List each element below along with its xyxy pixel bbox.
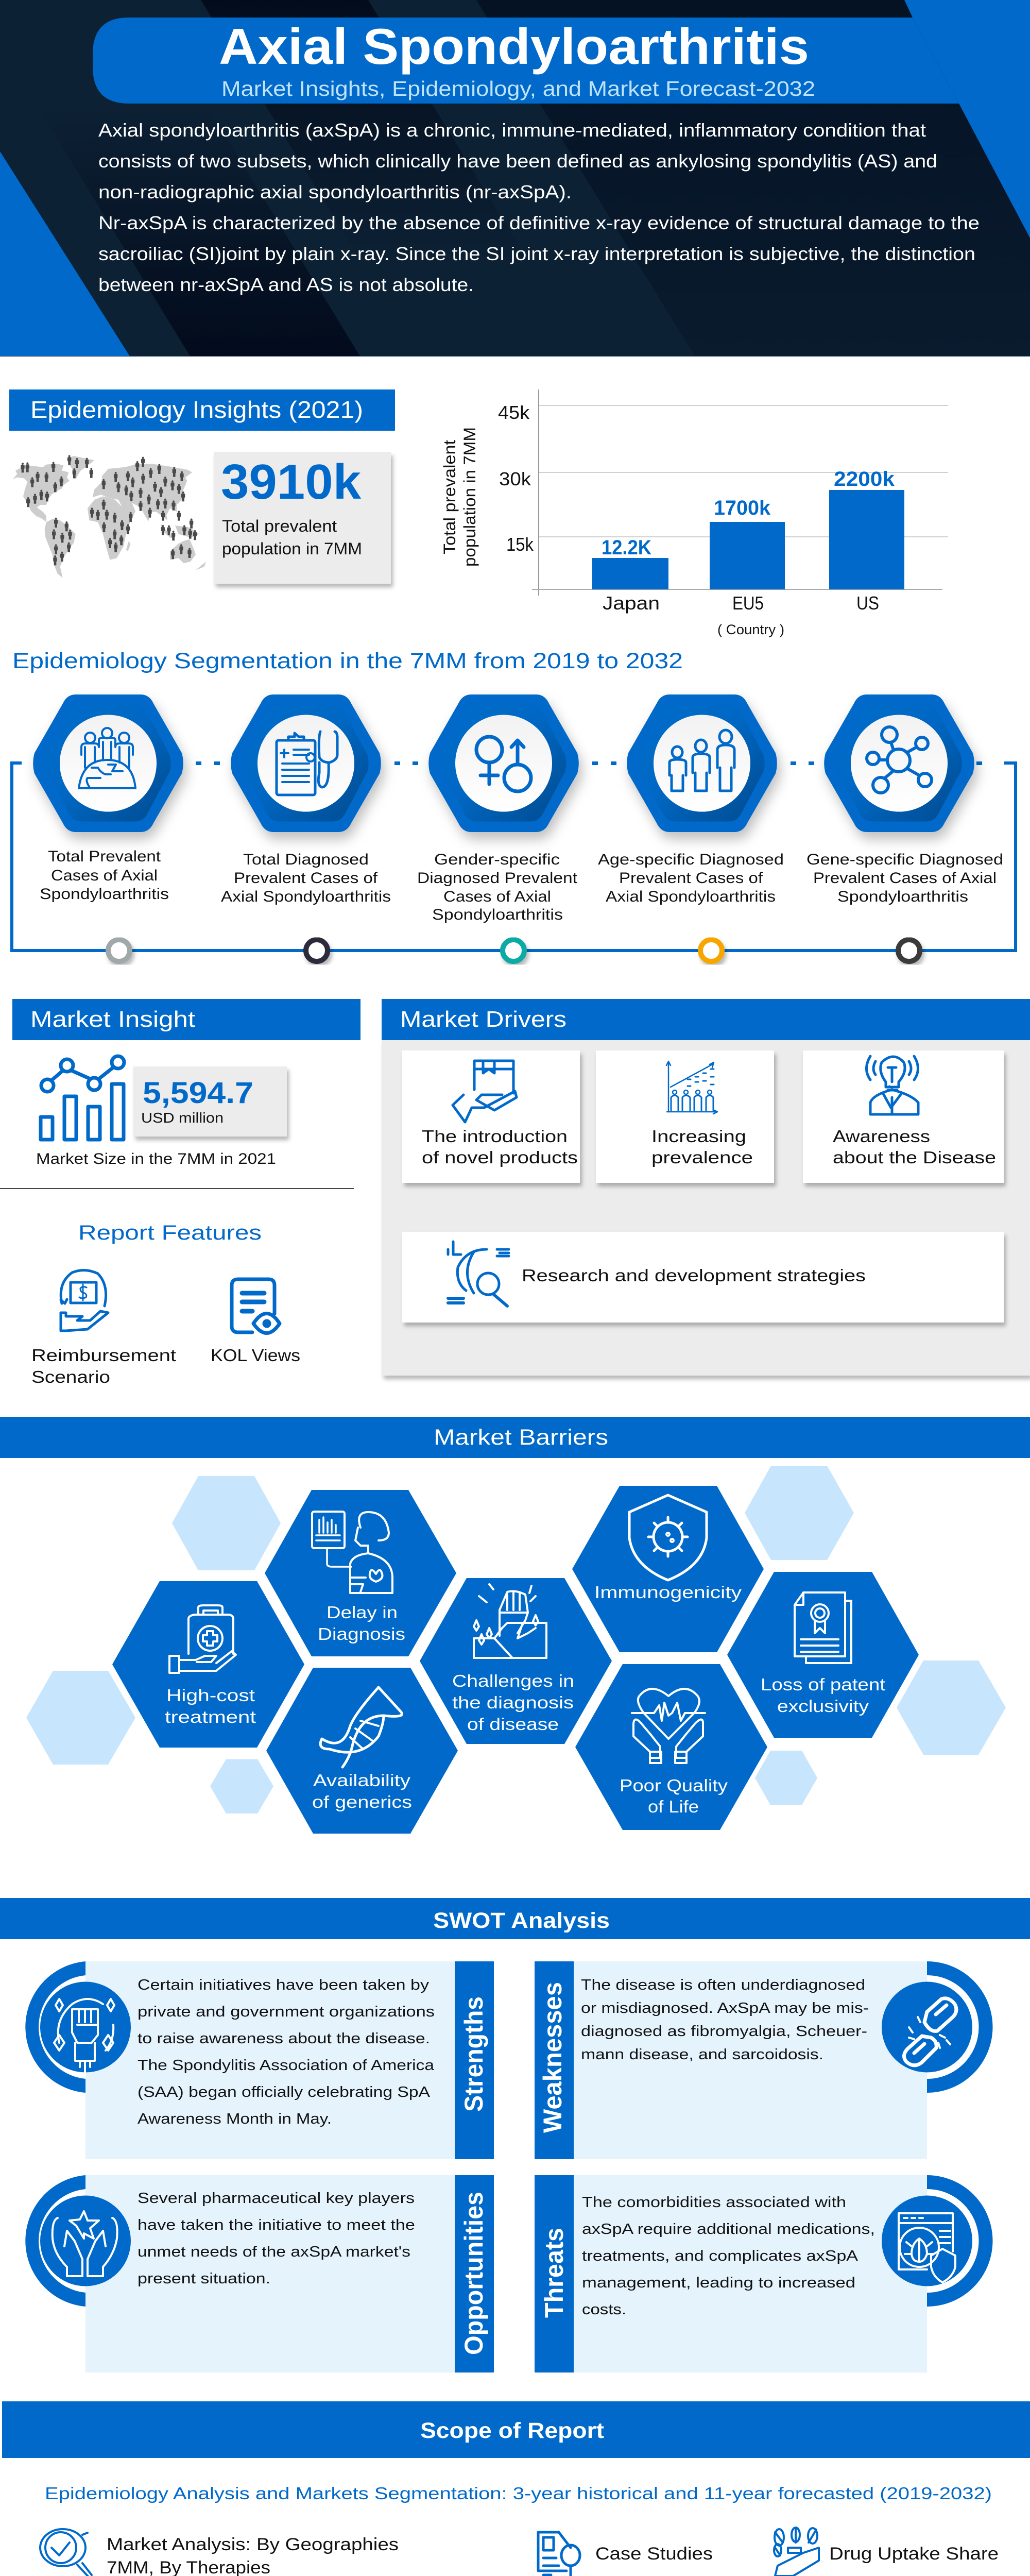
barrier: high-cost treatment: treatment [165,1707,256,1726]
barrier: delay in diagnosis [265,1490,456,1656]
text: weaknesses: mann disease, and sarcoidosis. [581,2046,823,2063]
card: research and development: Research and development strategies [522,1266,866,1285]
card: disease awareness [803,1050,1004,1183]
segment labels: Spondyloarthritis [837,888,968,905]
text: strengths: Certain initiatives have been taken by [138,1977,430,1993]
panel: strengths: Strengths [459,1996,488,2112]
text: strengths: Awareness Month in May. [138,2111,332,2127]
card: novel products: of novel products [422,1148,578,1167]
text: threats [582,2194,875,2318]
icon: magnifier with chart [40,2529,92,2576]
segment labels: Axial Spondyloarthritis [221,888,391,905]
panel: market insight heading: Market Insight [30,1007,195,1032]
barrier: high-cost treatment: High-cost [166,1686,255,1705]
text: weaknesses: or misdiagnosed. AxSpA may be mis- [581,2000,869,2016]
barrier: loss of patent exclusivity [727,1572,919,1738]
card: novel products [402,1050,580,1183]
icon: growth chart [41,1056,124,1140]
card: disease awareness: Awareness [833,1127,930,1146]
panel: weaknesses [535,1961,993,2159]
segment labels: Total Prevalent [48,848,161,865]
label: weaknesses [535,1961,574,2159]
intro paragraph: between nr-axSpA and AS is not absolute. [98,274,474,295]
intro paragraph: sacroiliac (SI)joint by plain x-ray. Since the SI joint x-ray interpretation is subjective, the distinction [98,243,975,264]
text: report feature labels [31,1346,300,1386]
barrier: loss of patent exclusivity: exclusivity [777,1697,869,1716]
heading: market barriers [0,1417,1030,1458]
text: report feature labels: Scenario [31,1367,110,1386]
intro paragraph: consists of two subsets, which clinically have been defined as ankylosing spondylitis (AS) and [98,150,937,172]
label: opportunities [455,2175,494,2372]
text: opportunities: Several pharmaceutical key players [138,2190,415,2207]
icon: document with magnifier [538,2532,580,2576]
icon: raised fist [54,1999,114,2076]
barrier: challenges in diagnosis: Challenges in [452,1671,574,1690]
segment 2: total diagnosed prevalent [231,694,381,832]
icon: molecule [867,727,932,793]
text: opportunities: unmet needs of the axSpA market's [138,2244,410,2260]
segment 4: age-specific [627,694,777,832]
panel: market insight heading [12,999,360,1040]
icon: clipboard and stethoscope [277,732,337,795]
text: strengths [138,1977,435,2127]
panel: threats: Threats [540,2228,569,2318]
segment 5: gene-specific [824,694,974,832]
card: disease awareness: about the Disease [833,1148,996,1167]
barrier: delay in diagnosis: Diagnosis [318,1624,405,1643]
barrier: challenges in diagnosis [420,1578,612,1744]
bar chart: prevalent population by country: 2200k [834,468,895,490]
heading: scope of report [2,2401,1030,2458]
scope item: case studies: Case Studies [595,2544,713,2564]
panel: threats [535,2175,993,2372]
bar chart: prevalent population by country: 1700k [714,497,771,519]
card: increasing prevalence: Increasing [651,1127,746,1146]
text: opportunities: present situation. [138,2270,270,2287]
callout: total prevalent population: Total prevalent [222,517,337,535]
segment 1: total prevalent cases [33,694,183,832]
segment 3: gender-specific [428,694,579,832]
segment labels: Total Diagnosed [243,851,369,868]
barrier: delay in diagnosis: Delay in [327,1603,398,1622]
icon: DNA helix [320,1687,402,1767]
card: novel products: The introduction [422,1127,568,1146]
panel: weaknesses: Weaknesses [538,1982,567,2133]
heading: scope of report: Scope of Report [420,2418,604,2443]
segment labels: Gene-specific Diagnosed [806,851,1003,868]
segment labels: Spondyloarthritis [40,886,169,903]
icon: patient and monitor [312,1512,392,1593]
text: strengths: (SAA) began officially celebrating SpA [138,2084,431,2100]
segment labels: Cases of Axial [443,888,551,905]
icon: people on globe [79,728,135,788]
scope item: market analysis: Market Analysis: By Geographies [107,2535,399,2554]
callout: total prevalent population [214,452,391,584]
decorative light hexagons [26,1466,1006,1814]
panel: opportunities [25,2175,494,2372]
title: Axial Spondyloarthritis [219,18,809,75]
icon: heart in hands [632,1689,705,1763]
icon: star in hands [53,2211,117,2276]
segment labels: Axial Spondyloarthritis [606,888,776,905]
text: report feature labels: KOL Views [211,1346,300,1365]
text: weaknesses: The disease is often underdiagnosed [581,1977,865,1993]
text: opportunities: have taken the initiative to meet the [138,2217,415,2233]
segment labels: Diagnosed Prevalent [417,870,578,887]
icon: family [670,730,734,791]
callout: market size: 5,594.7 [143,1076,253,1110]
heading: market drivers: Market Drivers [400,1007,566,1032]
barrier: loss of patent exclusivity: Loss of patent [761,1675,885,1694]
scope item: market analysis [40,2529,399,2576]
card: increasing prevalence [596,1050,774,1183]
bar chart: prevalent population by country: ( Country ) [717,622,784,637]
callout: market size: USD million [141,1110,224,1126]
callout: market size [133,1066,287,1137]
icon: certificate [795,1592,851,1663]
text: market size caption: Market Size in the 7MM in 2021 [36,1150,276,1167]
callout: total prevalent population: population in 7MM [222,539,362,558]
world map with people [13,455,206,578]
panel: opportunities: Opportunities [459,2192,488,2355]
segment labels: Cases of Axial [51,867,158,884]
bar chart: prevalent population by country: Total prevalent [440,440,459,554]
icon: gender symbols [476,737,531,791]
card: increasing prevalence: prevalence [651,1148,753,1167]
segment labels: Age-specific Diagnosed [598,851,784,868]
icon: reimbursement [61,1270,108,1331]
barrier: high-cost treatment [112,1581,304,1748]
segment labels: Gender-specific [434,851,560,868]
title banner [93,18,959,104]
segmentation connector frame [12,761,1016,951]
heading: report features: Report Features [78,1222,262,1244]
barrier: availability of generics [266,1668,458,1834]
icon: pills in hand [774,2528,819,2576]
barrier: availability of generics: Availability [313,1771,411,1790]
bar chart: prevalent population by country: 45k [498,402,530,423]
text: weaknesses: diagnosed as fibromyalgia, Scheuer- [581,2023,867,2040]
bar chart: prevalent population by country: 30k [499,468,531,489]
text: strengths: private and government organizations [138,2004,435,2020]
icon: shield with virus [629,1495,707,1580]
callout: total prevalent population: 3910k [221,454,362,510]
text: threats: treatments, and complicates axSpA [582,2248,859,2264]
icon: medical kit in hand [169,1605,236,1673]
bar chart: prevalent population by country: 15k [506,534,534,555]
segment labels: Spondyloarthritis [432,906,563,923]
text: weaknesses [581,1977,869,2063]
barrier: availability of generics: of generics [312,1792,412,1811]
segment labels [40,848,1003,923]
icon: broken chain [904,1998,956,2065]
bar chart: prevalent population by country: 12.2K [602,536,651,559]
segment labels: Prevalent Cases of [619,870,763,887]
heading: market barriers: Market Barriers [434,1425,608,1450]
bar chart: prevalent population by country: Japan [603,592,660,614]
barrier: poor quality of life [575,1664,767,1830]
barrier: immunogenicity [572,1486,764,1652]
barrier: poor quality of life: of Life [648,1797,699,1816]
intro paragraph: Nr-axSpA is characterized by the absence of definitive x-ray evidence of structural damage to the [98,212,980,233]
intro paragraph: non-radiographic axial spondyloarthritis (nr-axSpA). [98,181,572,202]
heading: SWOT analysis [0,1898,1030,1939]
bar chart: prevalent population by country: US [856,592,879,614]
label: strengths [455,1961,494,2159]
segment labels: Prevalent Cases of [234,870,378,887]
bar chart: prevalent population by country: EU5 [732,592,764,614]
barrier: immunogenicity: Immunogenicity [594,1583,742,1602]
text: threats: axSpA require additional medications, [582,2221,875,2238]
heading: SWOT analysis: SWOT Analysis [433,1908,610,1933]
panel: market drivers [382,999,1030,1376]
icon: browser with bug [899,2213,955,2282]
scope item: drug uptake share: Drug Uptake Share [829,2544,999,2564]
text: strengths: The Spondylitis Association of America [138,2057,435,2074]
subtitle: Market Insights, Epidemiology, and Market Forecast-2032 [221,77,815,100]
segment labels: Prevalent Cases of Axial [813,870,997,887]
intro paragraph: Axial spondyloarthritis (axSpA) is a chronic, immune-mediated, inflammatory condition that [98,120,926,141]
text: threats: management, leading to increased [582,2275,855,2291]
icon: fist breaking wall [474,1584,546,1658]
barrier: challenges in diagnosis: the diagnosis [452,1693,574,1712]
card: research and development [402,1232,1004,1323]
heading: epidemiology segmentation: Epidemiology Segmentation in the 7MM from 2019 to 2032 [12,649,683,673]
barrier: challenges in diagnosis: of disease [467,1715,559,1734]
scope item: drug uptake share [774,2528,999,2576]
timeline rings [108,940,920,961]
text: strengths: to raise awareness about the disease. [138,2030,430,2047]
text: report feature labels: Reimbursement [31,1346,176,1365]
header background [0,0,1030,357]
subheading: analysis period: Epidemiology Analysis and Markets Segmentation: 3-year historical and 11-year forecasted (2019-2032) [45,2484,992,2503]
text: threats: costs. [582,2301,626,2318]
scope item: case studies [538,2532,713,2576]
barrier: poor quality of life: Poor Quality [620,1776,728,1795]
text: threats: The comorbidities associated with [582,2194,846,2211]
intro paragraph [98,120,980,295]
icon: KOL views [232,1279,280,1333]
panel: epidemiology insights heading [9,389,395,431]
panel: strengths [25,1961,494,2159]
label: threats [535,2175,574,2372]
bar chart: prevalent population by country [440,389,948,637]
bar chart: prevalent population by country: population in 7MM [460,427,479,567]
text: opportunities [138,2190,415,2287]
panel: epidemiology insights heading: Epidemiology Insights (2021) [30,396,363,423]
